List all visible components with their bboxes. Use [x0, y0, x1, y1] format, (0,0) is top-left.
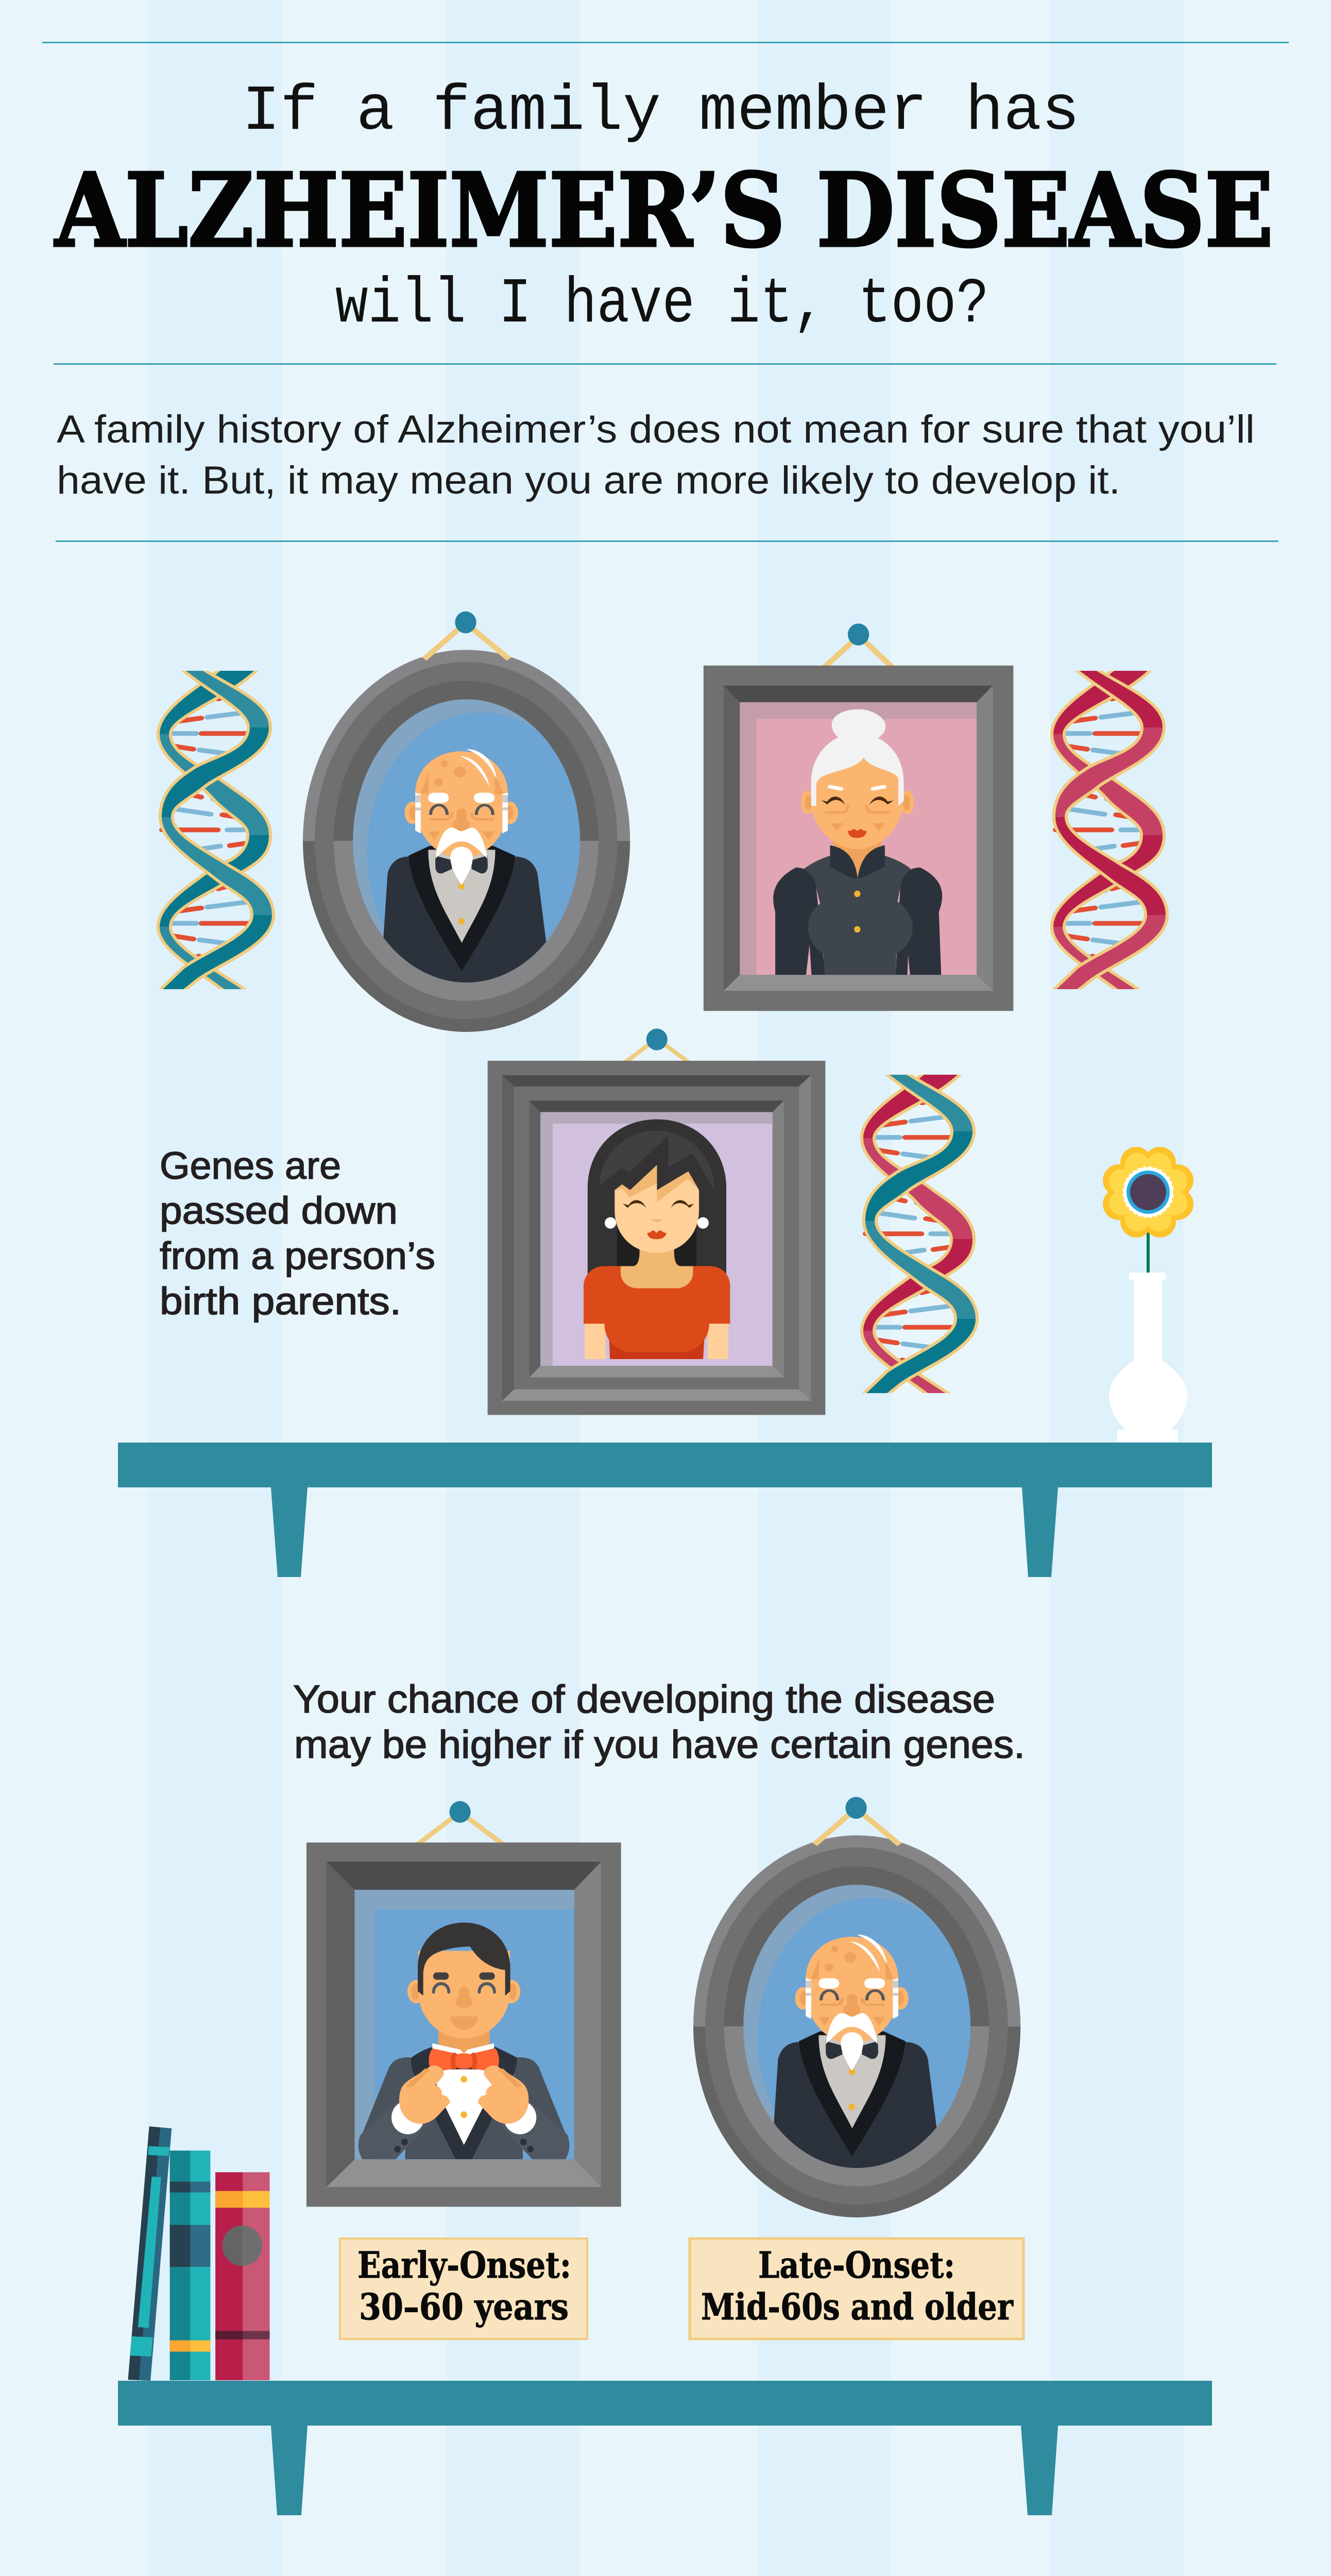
callout: early-onset age range: 30–60 years	[359, 2285, 569, 2328]
icon: books	[128, 2126, 270, 2381]
callout: early-onset age range: Early-Onset:	[357, 2244, 571, 2286]
text: genes are passed down: from a person’s	[160, 1234, 435, 1277]
callout: late-onset age range	[690, 2239, 1023, 2339]
text: genes are passed down: passed down	[160, 1189, 398, 1232]
icon: mixed DNA helix	[862, 1071, 976, 1397]
text: genes are passed down: Genes are	[160, 1144, 341, 1187]
portrait: grandmother in rectangular frame	[704, 623, 1013, 1011]
text: chance of developing: may be higher if you have certain genes.	[294, 1723, 1025, 1767]
portrait: grandfather in oval frame	[303, 612, 630, 1032]
title block: will I have it, too?	[335, 269, 989, 341]
title block: If a family member has	[242, 76, 1080, 148]
text: genes are passed down	[160, 1144, 435, 1323]
portrait: old man (late onset) in oval frame	[693, 1797, 1020, 2217]
icon: teal DNA helix	[159, 667, 272, 993]
icon: flower in white vase	[1103, 1147, 1193, 1442]
text: chance of developing	[293, 1677, 1025, 1767]
shelf 2	[118, 2381, 1212, 2515]
text: chance of developing: Your chance of developing the disease	[293, 1677, 995, 1721]
intro text	[56, 408, 1278, 542]
shelf 1	[118, 1443, 1212, 1577]
callout: late-onset age range: Late-Onset:	[758, 2244, 955, 2286]
intro text: have it. But, it may mean you are more likely to develop it.	[57, 459, 1120, 502]
portrait: young man in rectangular frame	[306, 1801, 621, 2207]
title block	[42, 42, 1289, 365]
icon: crimson DNA helix	[1052, 667, 1166, 993]
portrait: mother in double frame	[488, 1028, 825, 1415]
callout: early-onset age range	[340, 2239, 587, 2339]
callout: late-onset age range: Mid-60s and older	[701, 2285, 1014, 2328]
intro text: A family history of Alzheimer’s does not mean for sure that you’ll	[57, 408, 1255, 451]
text: genes are passed down: birth parents.	[160, 1280, 401, 1323]
